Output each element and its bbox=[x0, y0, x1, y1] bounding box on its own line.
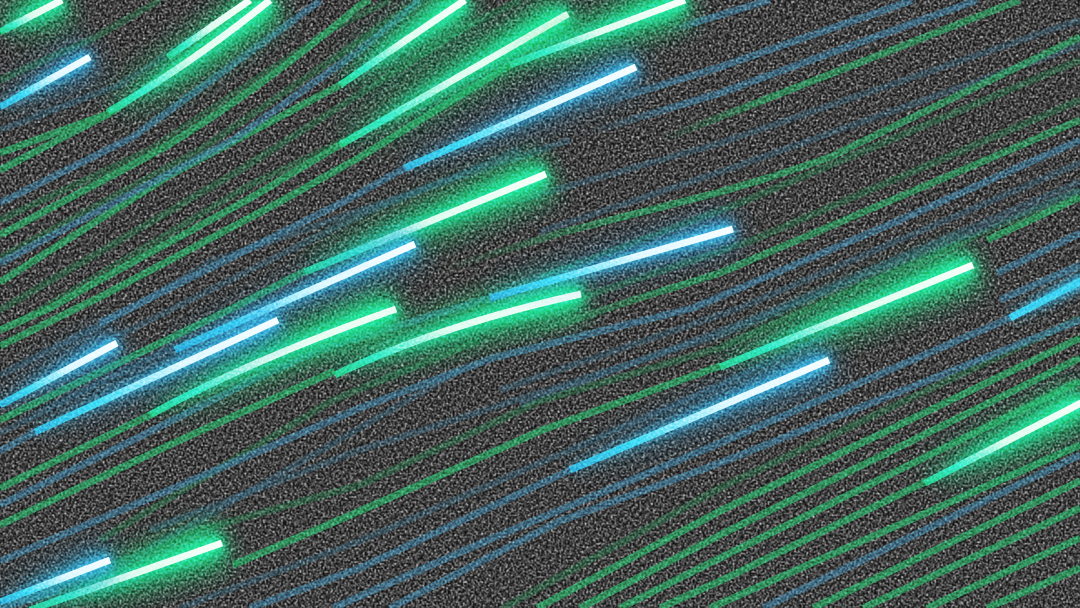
green streak 5 bbox=[510, 0, 685, 65]
blue streak 3 bbox=[175, 244, 415, 350]
green streak 4 bbox=[340, 14, 568, 145]
green streak 9 bbox=[720, 265, 973, 367]
blue streak 5 bbox=[35, 320, 278, 432]
green streak 1 bbox=[0, 0, 62, 32]
blue streak 9 bbox=[0, 560, 110, 602]
blue streak 1 bbox=[0, 57, 90, 107]
green streak 2 bbox=[108, 0, 270, 112]
blue streak 6 bbox=[0, 343, 117, 405]
green streak 8 bbox=[335, 294, 581, 375]
green streak 11 bbox=[30, 543, 222, 608]
green streak 7 bbox=[150, 309, 396, 415]
green streak 6 bbox=[305, 174, 546, 272]
blue streak 7 bbox=[570, 360, 829, 470]
blue streak 2 bbox=[405, 67, 636, 168]
blue streak 8 bbox=[1010, 279, 1080, 318]
green streak 2b bbox=[168, 0, 250, 57]
green streak 3 bbox=[340, 0, 465, 85]
blue streak 4 bbox=[490, 229, 733, 298]
green streak 10 bbox=[925, 401, 1080, 483]
